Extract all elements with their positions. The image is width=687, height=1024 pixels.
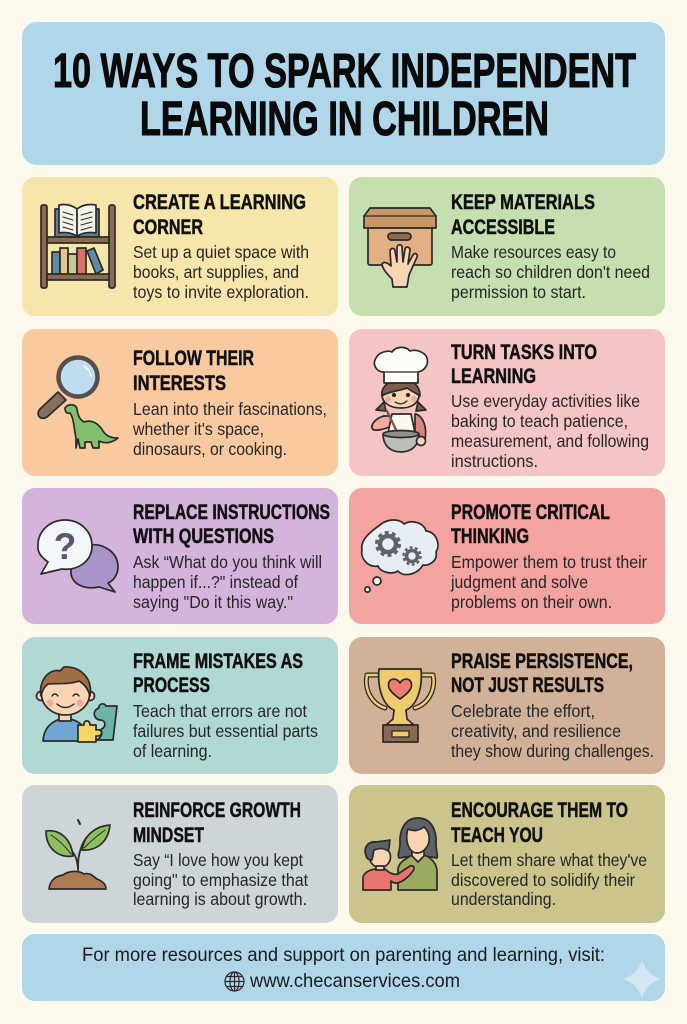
body text bbox=[133, 552, 322, 612]
heading: CORNER bbox=[133, 216, 203, 239]
heading: PRAISE PERSISTENCE, bbox=[451, 650, 633, 673]
icon: seedling in soil bbox=[46, 820, 110, 889]
heading: MINDSET bbox=[133, 824, 204, 847]
icon: trophy with heart bbox=[366, 669, 434, 742]
title banner bbox=[22, 22, 665, 165]
body text: creativity, and resilience bbox=[451, 721, 621, 741]
icon: bookshelf with books bbox=[41, 204, 115, 288]
footer text: For more resources and support on parenting and learning, visit: bbox=[82, 944, 605, 966]
body text: happen if...?" instead of bbox=[133, 572, 298, 592]
heading: LEARNING bbox=[451, 365, 536, 388]
body text: learning is about growth. bbox=[133, 889, 307, 909]
heading: KEEP MATERIALS bbox=[451, 191, 595, 214]
heading: ACCESSIBLE bbox=[451, 216, 555, 239]
panel: keep materials accessible bbox=[349, 177, 665, 316]
body text: judgment and solve bbox=[450, 572, 588, 592]
icon: speech bubbles with question mark bbox=[38, 520, 118, 592]
body text: saying "Do it this way." bbox=[133, 592, 293, 612]
body text: problems on their own. bbox=[451, 592, 612, 612]
body text: Let them share what they've bbox=[451, 850, 647, 870]
body text: baking to teach patience, bbox=[451, 411, 628, 431]
body text: reach so children don't need bbox=[451, 262, 650, 282]
body text bbox=[451, 850, 647, 909]
heading: REPLACE INSTRUCTIONS bbox=[133, 501, 330, 524]
heading: TURN TASKS INTO bbox=[451, 341, 597, 364]
heading bbox=[451, 501, 610, 548]
heading: PROMOTE CRITICAL bbox=[451, 501, 610, 524]
body text: failures but essential parts bbox=[133, 721, 318, 741]
panel: follow their interests bbox=[22, 329, 338, 476]
heading: ENCOURAGE THEM TO bbox=[451, 799, 628, 822]
body text: books, art supplies, and bbox=[133, 262, 299, 282]
body text: Teach that errors are not bbox=[133, 701, 307, 721]
heading: TEACH YOU bbox=[451, 824, 543, 847]
icon: thought cloud with gears bbox=[362, 520, 438, 592]
body text: toys to invite exploration. bbox=[133, 282, 309, 302]
heading bbox=[451, 191, 595, 239]
body text bbox=[451, 391, 649, 471]
heading: INTERESTS bbox=[133, 372, 226, 395]
body text: measurement, and following bbox=[451, 431, 649, 451]
heading: CREATE A LEARNING bbox=[133, 191, 306, 214]
heading bbox=[133, 191, 306, 239]
body text: Ask “What do you think will bbox=[133, 552, 322, 572]
body text: Celebrate the effort, bbox=[451, 701, 595, 721]
heading: NOT JUST RESULTS bbox=[451, 674, 604, 697]
icon: sparkle bbox=[622, 960, 661, 999]
heading bbox=[451, 341, 597, 388]
body text: understanding. bbox=[451, 889, 556, 909]
heading: FOLLOW THEIR bbox=[133, 347, 254, 370]
body text: discovered to solidify their bbox=[451, 870, 635, 890]
heading bbox=[133, 501, 330, 548]
panel: promote critical thinking bbox=[349, 488, 665, 624]
panel: encourage them to teach you bbox=[349, 785, 665, 923]
panel: reinforce growth mindset bbox=[22, 785, 338, 923]
body text bbox=[133, 850, 308, 909]
heading: PROCESS bbox=[133, 674, 210, 697]
body text bbox=[133, 701, 318, 761]
heading bbox=[451, 650, 633, 697]
body text bbox=[451, 701, 654, 761]
body text: Lean into their fascinations, bbox=[133, 399, 327, 419]
body text: Say “I love how you kept bbox=[133, 850, 303, 870]
heading bbox=[133, 799, 301, 847]
body text: dinosaurs, or cooking. bbox=[133, 439, 287, 459]
body text: Empower them to trust their bbox=[451, 552, 647, 572]
body text: going" to emphasize that bbox=[133, 870, 308, 890]
body text: Make resources easy to bbox=[451, 242, 616, 262]
icon: magnifying glass bbox=[38, 358, 98, 418]
body text bbox=[132, 399, 327, 459]
icon: globe bbox=[225, 972, 244, 991]
icon: parent and child bbox=[363, 818, 437, 890]
icon: smiling boy with puzzle bbox=[36, 667, 117, 742]
panel: replace instructions with questions bbox=[22, 488, 338, 624]
website address: www.checanservices.com bbox=[249, 970, 460, 992]
body text bbox=[133, 242, 309, 302]
panel: turn tasks into learning bbox=[349, 329, 665, 476]
heading bbox=[451, 799, 628, 847]
panel: create a learning corner bbox=[22, 177, 338, 316]
body text: Use everyday activities like bbox=[451, 391, 640, 411]
body text: of learning. bbox=[133, 741, 212, 761]
icon: green dinosaur bbox=[65, 405, 118, 448]
heading: REINFORCE GROWTH bbox=[133, 799, 301, 822]
body text: permission to start. bbox=[451, 282, 586, 302]
panel: frame mistakes as process bbox=[22, 637, 338, 774]
icon: speech bubbles with question mark: ? bbox=[54, 526, 76, 567]
body text: Set up a quiet space with bbox=[133, 242, 309, 262]
body text bbox=[451, 242, 650, 302]
icon: box and hand bbox=[364, 208, 436, 287]
body text: whether it's space, bbox=[132, 419, 264, 439]
body text: they show during challenges. bbox=[451, 741, 654, 761]
heading bbox=[133, 347, 254, 395]
icon: child chef baking bbox=[372, 347, 427, 452]
panel: praise persistence bbox=[349, 637, 665, 774]
heading bbox=[133, 650, 303, 697]
heading: THINKING bbox=[451, 525, 529, 548]
footer banner bbox=[22, 934, 665, 1001]
body text: instructions. bbox=[451, 451, 538, 471]
body text bbox=[450, 552, 647, 612]
heading: WITH QUESTIONS bbox=[133, 525, 274, 548]
heading: FRAME MISTAKES AS bbox=[133, 650, 303, 673]
